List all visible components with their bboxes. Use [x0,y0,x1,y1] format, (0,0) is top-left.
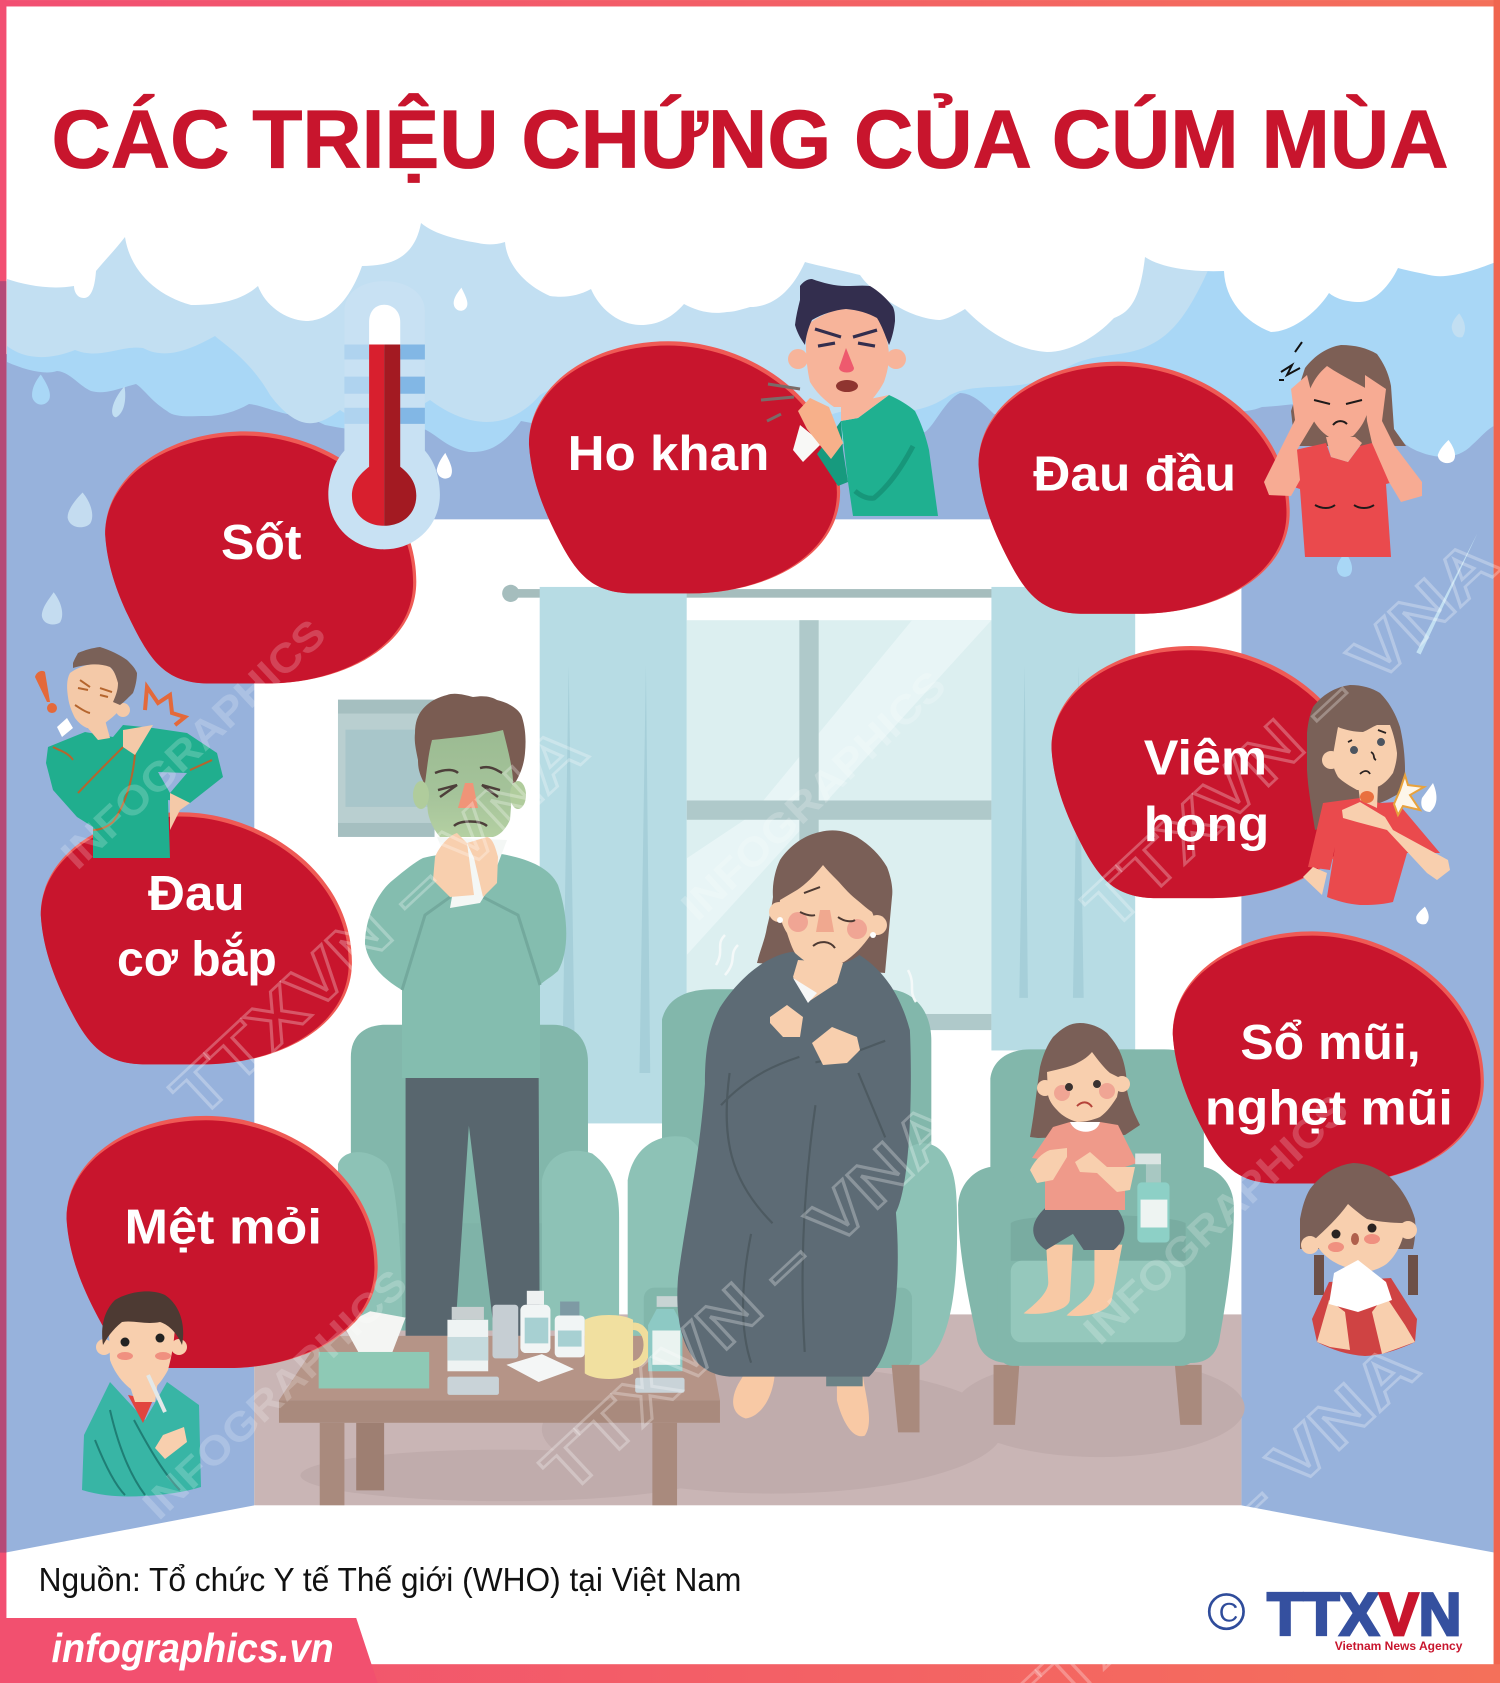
coughing man: tissue [793,425,822,462]
mug [585,1315,647,1379]
exclamation mark [35,671,57,713]
runny nose girl: tissue [1329,1260,1392,1312]
sore throat woman: arm [1342,802,1450,880]
pain zigzag [145,687,185,725]
watermarks: INFOGRAPHICS [134,1260,416,1528]
bubble: Đau đầu [979,362,1290,614]
bottom white area [0,1505,1500,1683]
man: sweater [365,852,566,1078]
muscle man: neck [87,720,110,740]
bubble: Sổ mũi, nghẹt mũi [1173,931,1484,1184]
muscle man: hands [123,725,190,830]
bubble: Đau cơ bắp: Đau [148,866,245,921]
bubble: Ho khan: Ho khan [568,426,769,481]
bubble: Sốt [105,431,416,684]
source line: Nguồn: Tổ chức Y tế Thế giới (WHO) tại Việt Nam [39,1562,741,1599]
headache woman: face [1310,366,1368,438]
man standing [365,694,566,1336]
tired boy: shirt [128,1395,153,1423]
tired boy: blanket [82,1382,201,1497]
woman: head and hands [716,865,916,1065]
bubble: Mệt mỏi [67,1116,378,1368]
curtains [540,587,1135,1123]
bubble: Viêm họng: họng [1144,797,1269,852]
sore throat woman: shirt [1308,798,1440,905]
watermarks: TTXVN – VNA [158,712,601,1132]
coughing man: hair [795,279,895,345]
headache woman: arms [1264,375,1318,496]
tired boy: neck [128,1380,158,1402]
watermarks: INFOGRAPHICS [1075,1085,1357,1353]
bubble: Đau cơ bắp [41,812,352,1064]
spray bottle [648,1296,682,1371]
child: upper body [1030,1023,1140,1210]
woman in blanket [677,830,916,1436]
muscle man: sweater [46,725,223,858]
bubble: Viêm họng: Viêm [1144,731,1267,786]
medicine bottles [447,1291,685,1395]
raindrop [1421,783,1436,812]
bubble: Sốt: Sốt [221,515,302,570]
room interior [254,519,1245,1506]
icon: thermometer [328,281,440,549]
icon: woman with headache [1264,342,1422,557]
coughing man: head [788,349,808,369]
tired boy: hand [155,1427,187,1459]
icon: girl with runny nose [1300,1163,1418,1356]
headache woman: neck [1326,437,1362,462]
watermarks: TTXVN – VNA [528,1088,971,1508]
spray bottle on chair [1135,1153,1170,1243]
bubble: Đau cơ bắp: cơ bắp [117,930,277,986]
man: tissue [437,837,507,908]
headache woman: hair [1291,345,1406,446]
sore throat woman: face [1322,751,1340,769]
icon: woman with sore throat [1303,685,1450,905]
coughing man: hand [798,398,843,459]
muscle man: face [116,703,130,717]
table with medicine [279,1291,720,1505]
watermarks [52,524,1500,1683]
logo: TTXVN: Vietnam News Agency [1335,1639,1463,1653]
icon: tired boy with thermometer [82,1291,201,1497]
bubble: Viêm họng [1052,646,1363,898]
cough lines [761,384,800,421]
tired boy: head [96,1339,112,1355]
sore throat woman: neck [1358,785,1378,808]
child [1024,1023,1170,1316]
coughing man: neck [841,395,889,421]
man: hair [415,694,526,790]
runny nose girl: arms [1317,1295,1415,1354]
man: upper body [365,694,566,1078]
headache woman: crease marks [1315,505,1374,508]
curtain rod [502,585,994,602]
bubble: Ho khan [529,341,840,593]
armchair right [958,1049,1234,1425]
runny nose girl: braids [1314,1255,1418,1295]
website tab: infographics.vn [52,1625,334,1671]
watermarks: INFOGRAPHICS [52,610,334,878]
sofa left [338,1025,619,1331]
bubble: Sổ mũi, nghẹt mũi: Sổ mũi, [1240,1015,1421,1070]
woman: feet [733,1363,869,1436]
tired boy: thermometer [148,1375,165,1412]
website tab [0,1618,378,1683]
logo: TTXVN: C [1219,1597,1238,1627]
headache woman: shirt [1291,443,1394,557]
icon: man with muscle pain [35,647,223,858]
man: hands [433,833,498,897]
coughing man: face details [815,329,877,346]
icon: coughing man [761,279,938,516]
bubble: Mệt mỏi: Mệt mỏi [124,1200,322,1255]
child: shorts and legs [1024,1245,1122,1316]
window [687,620,991,1030]
title: CÁC TRIỆU CHỨNG CỦA CÚM MÙA [52,92,1448,185]
headache woman: pain marks [1279,342,1302,380]
runny nose girl: hair [1300,1163,1415,1249]
runny nose girl: ears and face [1301,1236,1319,1254]
coughing man: sleeve [817,421,848,486]
coughing man: shirt [841,395,938,516]
watermarks: INFOGRAPHICS [672,662,955,929]
muscle man: hair [73,647,137,705]
watermarks: TTXVN – VNA [1070,524,1500,944]
sore throat woman: hair [1307,685,1405,830]
pain spark [1394,775,1424,815]
wall picture [338,700,435,837]
woman: blanket [677,952,911,1377]
raindrops [32,288,1477,924]
tired boy: hair [102,1291,183,1345]
armchair middle [628,989,957,1432]
logo: TTXVN: TTXVN [1267,1581,1461,1648]
runny nose girl: shirt [1312,1278,1417,1356]
tissue box [319,1311,429,1388]
man: trousers [406,1068,540,1336]
man: face [425,730,513,837]
woman: upper hair [757,830,892,973]
bubble: Đau đầu: Đau đầu [1033,446,1236,501]
muscle man: collar [57,718,73,737]
bubble: Sổ mũi, nghẹt mũi: nghẹt mũi [1205,1080,1453,1135]
